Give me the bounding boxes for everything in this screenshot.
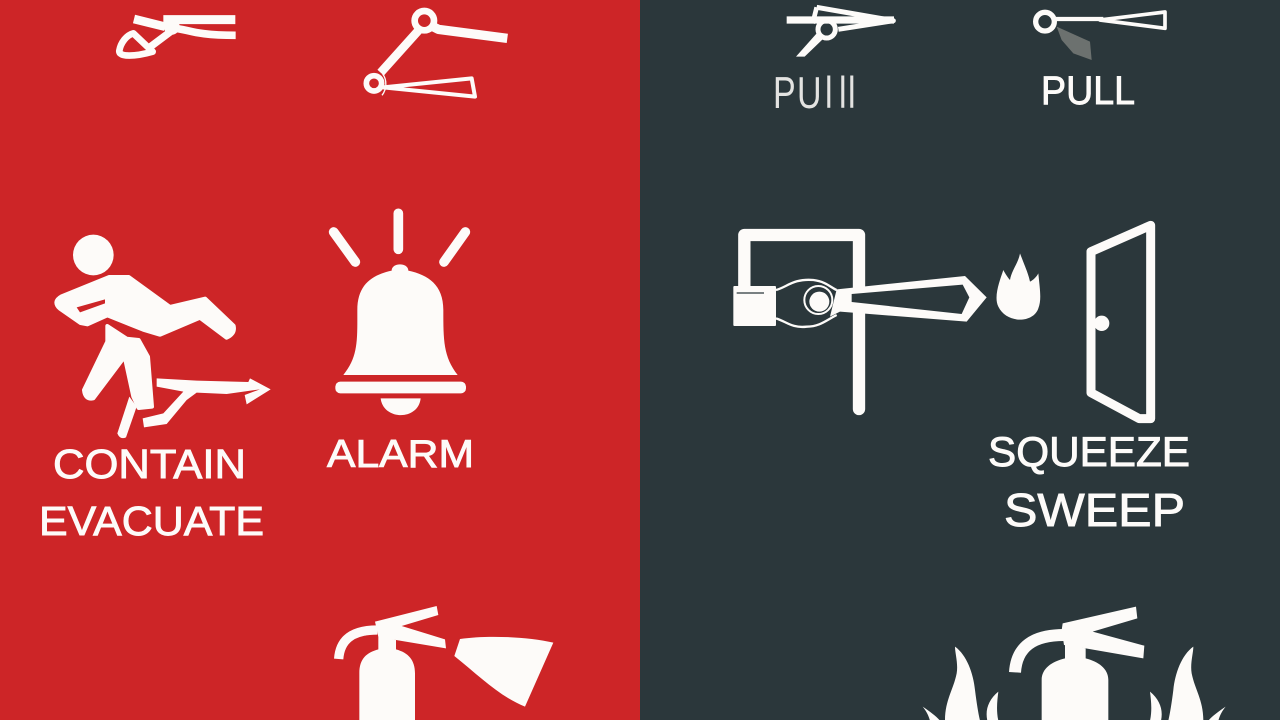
icon: small flame bbox=[997, 253, 1040, 320]
label: broken PULL: PUlll bbox=[773, 69, 856, 118]
heading: SWEEP: SWEEP bbox=[1004, 484, 1185, 536]
icon: extinguisher with flames bbox=[923, 607, 1226, 720]
icon: pull pin ring dark bbox=[1036, 12, 1165, 60]
icon: running person with arrow bbox=[57, 235, 271, 438]
heading: ALARM: ALARM bbox=[327, 433, 474, 476]
panel: red left half bbox=[0, 0, 640, 720]
icon: pull pin pliers dark bbox=[787, 7, 894, 57]
icon: door bbox=[1091, 225, 1151, 419]
icon: pull pin pliers left bbox=[119, 19, 236, 56]
label: PULL: PULL bbox=[1041, 69, 1135, 113]
heading: CONTAIN: CONTAIN bbox=[53, 441, 246, 487]
icon: frame with lock and handle bbox=[733, 235, 987, 409]
icon: alarm bell bbox=[334, 213, 466, 415]
heading: SQUEEZE: SQUEEZE bbox=[988, 428, 1190, 475]
icon: extinguisher with spray bbox=[339, 606, 553, 720]
heading: EVACUATE: EVACUATE bbox=[39, 498, 264, 544]
panel: dark right half bbox=[640, 0, 1280, 720]
icon: pull pin ring right bbox=[366, 11, 507, 97]
